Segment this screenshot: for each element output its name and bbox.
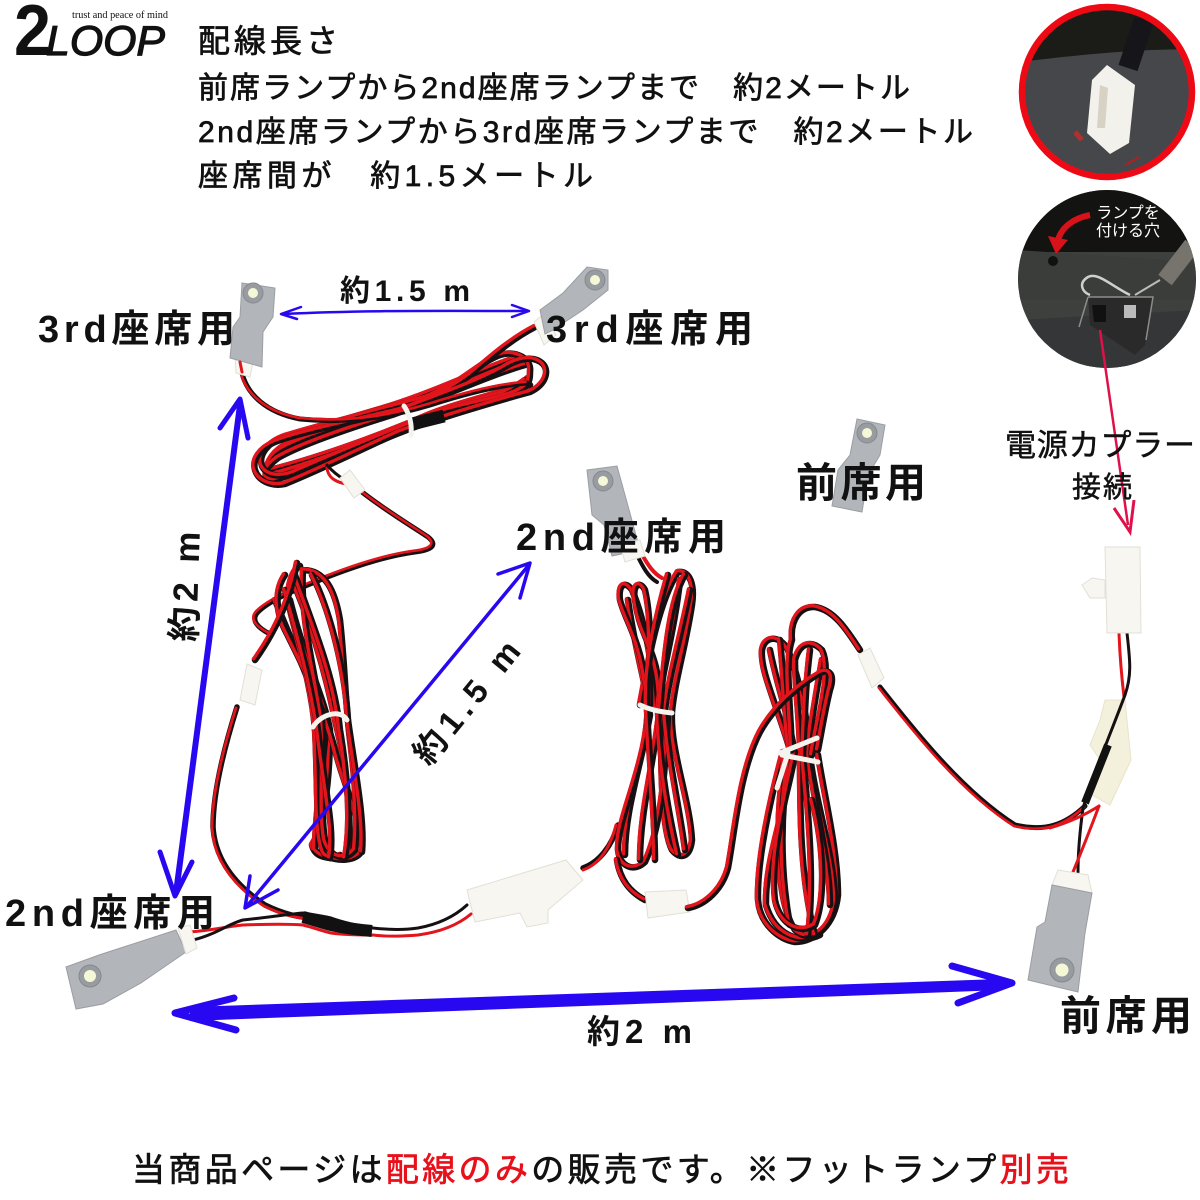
lamp: 2nd seat lower left	[66, 925, 197, 1009]
wiring: lead between top and left coils	[253, 465, 433, 634]
wiring: power coupler and front lamp lead	[1050, 547, 1141, 872]
arrow: blue 1.5 m diagonal	[245, 563, 530, 908]
text block: wiring lengths	[198, 23, 973, 193]
text block: wiring lengths: 2nd座席ランプから3rd座席ランプまで 約2メートル	[198, 116, 973, 149]
label: 2nd seat lower left: 2nd座席用	[5, 893, 215, 935]
label: power coupler connection: 電源カプラー	[1005, 428, 1195, 463]
label: 3rd seat right: 3rd座席用	[546, 309, 753, 351]
text block: wiring lengths: 配線長さ	[198, 23, 338, 59]
lamp: 2nd seat center	[587, 466, 645, 562]
label: front seat upper: 前席用	[796, 460, 926, 506]
label: 3rd seat left: 3rd座席用	[38, 309, 235, 351]
label: 2 m horizontal: 約2 m	[587, 1013, 692, 1050]
arrow: blue 2 m vertical	[160, 399, 248, 896]
wiring: coil top, 3rd seat	[240, 326, 546, 485]
arrow: red, hole to power coupler	[1100, 330, 1134, 532]
logo: 2LOOP	[14, 0, 168, 71]
photo: lamp mounting hole	[1018, 190, 1196, 370]
label: 2 m vertical: 約2 m	[165, 531, 208, 642]
wiring: coil center	[616, 553, 693, 918]
logo: 2LOOP: LOOP	[46, 17, 165, 64]
arrow: blue 2 m horizontal	[175, 966, 1012, 1030]
logo: 2LOOP: trust and peace of mind	[72, 10, 168, 21]
photo: lamp mounting hole: ランプを	[1096, 204, 1160, 222]
wiring: coil left	[212, 562, 363, 919]
label: 1.5 m diagonal: 約1.5 m	[406, 633, 528, 771]
wiring: trunk and white junction	[190, 825, 618, 940]
lamp: front seat lower right	[1028, 870, 1092, 992]
label: 2nd seat center: 2nd座席用	[516, 517, 726, 559]
wiring: coil right	[686, 606, 1085, 942]
label: front seat lower right: 前席用	[1060, 993, 1192, 1039]
lamp: front seat, upper	[832, 419, 885, 512]
text block: wiring lengths: 前席ランプから2nd座席ランプまで 約2メートル	[198, 72, 910, 105]
label: 1.5 m top: 約1.5 m	[340, 275, 470, 308]
arrow: blue 1.5 m top	[281, 305, 529, 319]
photo: power connector in red circle	[1020, 0, 1195, 177]
text block: wiring lengths: 座席間が 約1.5メートル	[198, 160, 593, 193]
label: power coupler connection: 接続	[1072, 471, 1132, 504]
label: power coupler connection	[1005, 428, 1195, 504]
photo: lamp mounting hole: 付ける穴	[1096, 222, 1160, 240]
lamp: 3rd seat left	[230, 283, 275, 377]
footer note: 当商品ページは配線のみの販売です。※フットランプ別売	[132, 1151, 1069, 1188]
lamp: 3rd seat right	[534, 267, 608, 345]
